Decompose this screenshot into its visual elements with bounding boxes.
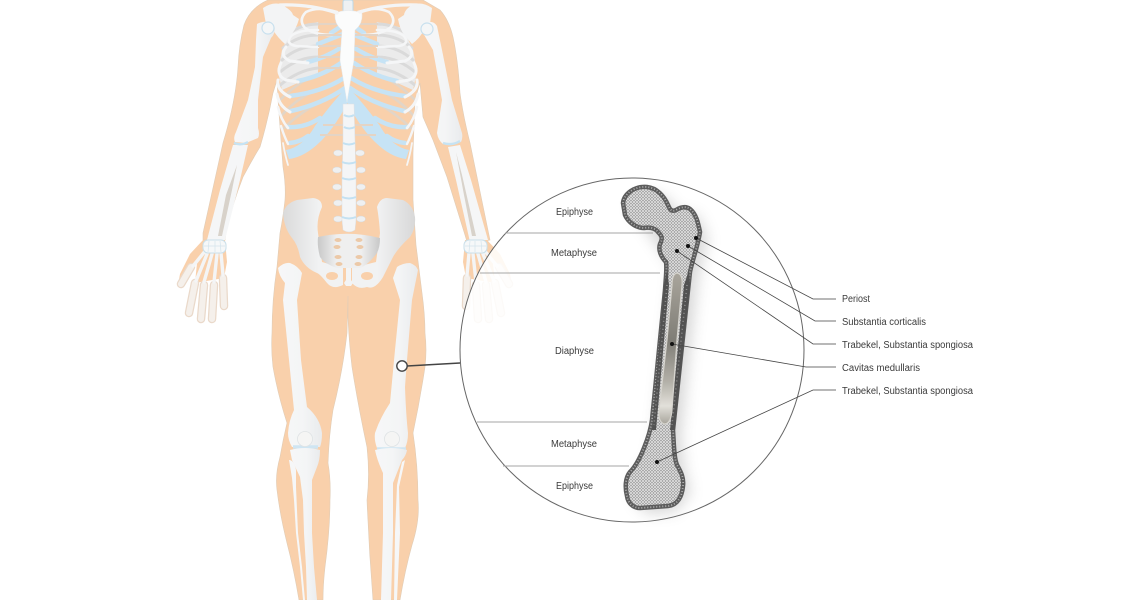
left humerus xyxy=(234,22,275,143)
right humerus xyxy=(423,22,462,144)
right wrist xyxy=(470,241,490,254)
cortex bands xyxy=(652,270,690,430)
left forearm xyxy=(207,145,248,240)
patellae xyxy=(298,432,312,446)
sternum xyxy=(335,10,362,102)
labels: bone structures: Periost xyxy=(842,294,870,305)
labels: bone structures: Trabekel, Substantia spongiosa xyxy=(842,340,973,351)
body silhouette xyxy=(203,0,490,600)
labels: bone structures: Trabekel, Substantia spongiosa xyxy=(842,386,973,397)
labels: bone regions xyxy=(551,207,597,492)
section divider lines xyxy=(477,233,660,466)
labels: bone regions: Epiphyse xyxy=(556,207,593,218)
left femur xyxy=(278,263,322,447)
periost speckle rim xyxy=(623,187,700,508)
labels: bone regions: Metaphyse xyxy=(551,248,597,259)
right lower leg bones xyxy=(375,448,407,600)
skeleton xyxy=(178,0,512,600)
left lower leg bones xyxy=(289,448,320,600)
left shoulder blade xyxy=(263,4,299,44)
femur body xyxy=(623,187,700,508)
spine xyxy=(332,0,366,232)
labels: bone structures: Substantia corticalis xyxy=(842,317,926,328)
detail circle xyxy=(460,178,804,522)
labels: bone regions: Diaphyse xyxy=(555,346,594,357)
labels: bone structures: Cavitas medullaris xyxy=(842,363,920,374)
right forearm xyxy=(448,145,488,242)
rib cage left xyxy=(277,9,349,165)
rib cage right xyxy=(346,9,418,165)
clavicles xyxy=(280,5,417,13)
zoom marker on thigh xyxy=(397,361,460,371)
medullary cavity xyxy=(659,273,682,424)
right shoulder blade xyxy=(398,4,432,44)
labels: bone structures xyxy=(842,294,973,397)
right hand xyxy=(463,240,512,319)
back ribs centre xyxy=(318,24,378,135)
labels: bone regions: Epiphyse xyxy=(556,481,593,492)
left hand xyxy=(178,240,227,319)
right femur xyxy=(375,263,418,448)
pelvis xyxy=(283,198,415,288)
knee cartilage xyxy=(293,447,406,449)
leader lines xyxy=(657,238,836,462)
femur cross section xyxy=(623,187,708,514)
leader dots xyxy=(655,236,698,464)
femur shadow xyxy=(631,193,708,514)
labels: bone regions: Metaphyse xyxy=(551,439,597,450)
